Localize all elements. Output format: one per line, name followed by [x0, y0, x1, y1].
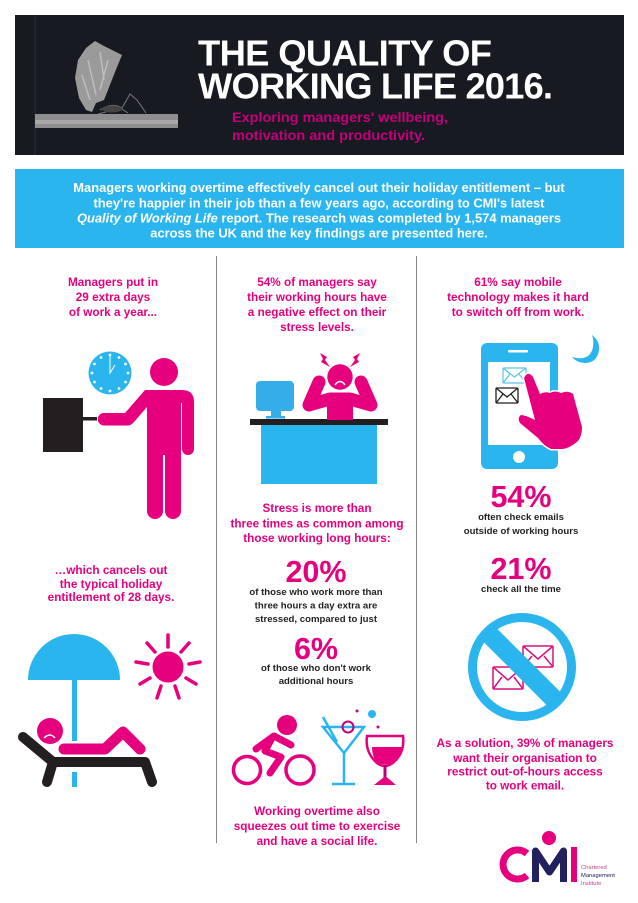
text: solution: restrict out-of-hours access — [447, 766, 603, 778]
icon: sunbather under umbrella — [23, 634, 200, 787]
heading: stress levels — [247, 276, 387, 334]
heading: stress levels: 54% of managers say — [257, 276, 377, 289]
heading: mobile technology: 61% say mobile — [474, 276, 562, 289]
logo: CMI: Institute — [581, 881, 601, 887]
stat: 20%: stressed, compared to just — [255, 614, 378, 625]
stat: 54%: 54% — [490, 480, 552, 514]
stat: 6%: of those who don't work — [261, 663, 372, 674]
stat: 20%: 20% — [285, 555, 347, 589]
text: exercise: squeezes out time to exercise — [234, 820, 401, 833]
stat: 54% — [464, 480, 578, 537]
stat: 20% — [249, 555, 383, 625]
title: THE QUALITY OF — [198, 32, 492, 74]
icon: cocktail and wine — [323, 710, 403, 785]
stat: 20%: three hours a day extra are — [255, 600, 377, 612]
text: exercise: and have a social life. — [257, 835, 377, 848]
stat: 20%: of those who work more than — [249, 587, 383, 598]
title — [198, 32, 553, 106]
heading: stress levels: a negative effect on their — [248, 306, 387, 319]
icon: phone and hand — [481, 335, 599, 469]
logo: CMI: Chartered — [581, 865, 607, 871]
stat: 54%: outside of working hours — [464, 526, 578, 537]
heading: 29 extra days: Managers put in — [68, 276, 158, 289]
logo: CMI — [503, 831, 615, 887]
panel: stress — [230, 276, 404, 848]
icon: ant carrying leaf — [35, 41, 178, 128]
panel: extra days — [23, 276, 200, 787]
text: stress common — [230, 502, 404, 545]
text: stress common: Stress is more than — [262, 502, 372, 515]
heading: 29 extra days: of work a year... — [69, 306, 157, 319]
text: cancels holiday: entitlement of 28 days. — [48, 591, 174, 604]
intro band: Quality of Working Life report. The research was completed by 1,574 managers — [77, 210, 561, 226]
subtitle — [232, 109, 448, 143]
intro band: across the UK and the key findings are presented here. — [150, 226, 488, 240]
heading: stress levels: their working hours have — [247, 291, 387, 304]
text: stress common: three times as common among — [230, 518, 404, 530]
header panel — [15, 15, 624, 155]
heading: mobile technology: technology makes it hard — [447, 291, 589, 304]
text: solution: As a solution, 39% of managers — [437, 737, 614, 750]
heading: mobile technology — [447, 276, 589, 319]
stat: 21%: 21% — [490, 552, 552, 586]
icon: stressed person at desk — [250, 353, 388, 484]
stat: 6% — [261, 632, 372, 687]
text: cancels holiday: the typical holiday — [60, 578, 163, 591]
heading: mobile technology: to switch off from work. — [452, 306, 584, 319]
text: solution — [437, 737, 614, 792]
heading: stress levels: stress levels. — [280, 321, 354, 334]
stat: 21% — [481, 552, 561, 595]
subtitle: motivation and productivity. — [232, 127, 425, 143]
heading: 29 extra days: 29 extra days — [76, 291, 151, 304]
text: solution: to work email. — [486, 780, 564, 792]
stat: 6%: 6% — [294, 632, 338, 666]
icon: no email — [472, 618, 572, 716]
heading: 29 extra days — [68, 276, 158, 319]
title: WORKING LIFE 2016. — [198, 66, 553, 106]
text: cancels holiday — [48, 564, 174, 604]
text: exercise — [234, 805, 401, 848]
icon: cyclist — [234, 715, 314, 784]
logo: CMI: Management — [581, 873, 615, 879]
icon: person with briefcase and clock — [43, 352, 194, 519]
stat: 54%: often check emails — [478, 512, 564, 523]
text: cancels holiday: …which cancels out — [55, 564, 168, 577]
intro band — [15, 169, 624, 248]
panel: mobile — [437, 276, 614, 792]
intro band: they're happier in their job than a few years ago, according to CMI's latest — [94, 196, 545, 210]
text: exercise: Working overtime also — [254, 805, 380, 818]
text: solution: want their organisation to — [452, 752, 597, 765]
subtitle: Exploring managers' wellbeing, — [232, 109, 448, 125]
intro band: Managers working overtime effectively cancel out their holiday entitlement – but — [73, 180, 565, 195]
stat: 6%: additional hours — [279, 676, 353, 687]
stat: 21%: check all the time — [481, 584, 561, 595]
text: stress common: those working long hours: — [243, 532, 391, 545]
